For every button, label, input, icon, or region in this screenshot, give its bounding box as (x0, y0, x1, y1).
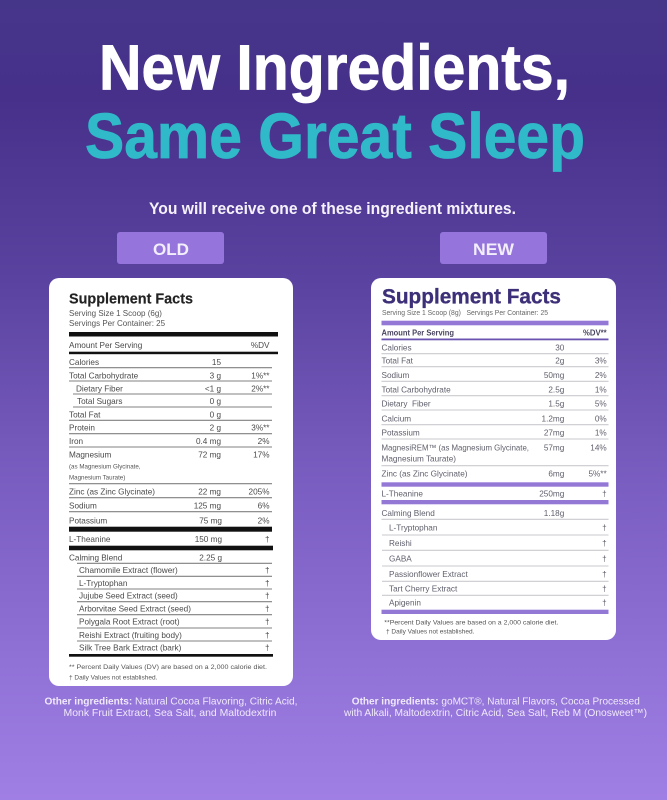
old nutrient rows: 3%** (251, 424, 270, 433)
old nutrient rows: 2 g (210, 424, 221, 433)
old row lines (69, 368, 272, 641)
new calming blend rows: † (602, 524, 607, 533)
old nutrient rows: Iron (69, 437, 84, 446)
tab: new: NEW (473, 240, 515, 259)
old other ingredients (44, 696, 298, 719)
subheading: You will receive one of these ingredient mixtures. (149, 200, 516, 218)
new card background (371, 278, 616, 640)
old nutrient rows: 72 mg (198, 451, 221, 460)
old nutrient rows: 2%** (251, 384, 270, 393)
new nutrient rows: Zinc (as Zinc Glycinate) (382, 470, 468, 479)
old nutrient rows: Magnesium Taurate) (69, 474, 125, 481)
old nutrient rows: Total Carbohydrate (69, 371, 139, 380)
old calming blend rows: † (265, 605, 270, 614)
old heading: Supplement Facts (69, 290, 193, 308)
title (85, 32, 585, 172)
new calming blend rows (382, 509, 607, 607)
new nutrient rows: Magnesium Taurate) (382, 455, 456, 464)
new nutrient rows: L-Theanine (382, 490, 423, 499)
old card background (49, 278, 293, 686)
new row lines (382, 354, 608, 595)
new calming blend rows: † (602, 554, 607, 563)
new nutrient rows: MagnesiREM™ (as Magnesium Glycinate, (382, 443, 529, 452)
new nutrient rows: 2g (555, 356, 565, 365)
old nutrient rows: 0 g (210, 397, 221, 406)
old calming blend rows: Chamomile Extract (flower) (79, 566, 178, 575)
new footnotes: **Percent Daily Values are based on a 2,000 calorie diet. (384, 619, 559, 626)
old nutrient rows: Calories (69, 358, 99, 367)
old calming blend rows: Jujube Seed Extract (seed) (79, 592, 178, 601)
old nutrient rows: 205% (249, 488, 270, 497)
new calming blend rows: Passionflower Extract (389, 570, 468, 579)
old nutrient rows: 22 mg (198, 488, 221, 497)
old footnotes: † Daily Values not established. (69, 674, 158, 681)
new nutrient rows: Calories (382, 344, 412, 353)
old calming blend rows: † (265, 592, 270, 601)
old nutrient rows: 2% (258, 437, 270, 446)
old calming blend rows: † (265, 631, 270, 640)
old nutrient rows: Total Fat (69, 411, 101, 420)
old nutrient rows: 6% (258, 501, 270, 510)
new header rule (382, 338, 608, 340)
new nutrient rows: 5%** (588, 470, 608, 479)
new calming blend rows: Calming Blend (382, 509, 435, 518)
new nutrient rows: 14% (590, 443, 607, 452)
new nutrient rows: 3% (595, 356, 607, 365)
new calming blend rows: GABA (389, 554, 412, 563)
new nutrient rows: Total Fat (382, 356, 414, 365)
new other ingredients: Other ingredients: goMCT®, Natural Flavors, Cocoa Processed (352, 696, 640, 707)
new nutrient rows: 57mg (544, 443, 565, 452)
old table header: Amount Per Serving (69, 341, 143, 350)
new nutrient rows: 30 (555, 344, 565, 353)
new calming blend rows: † (602, 585, 607, 594)
panel: old supplement facts (49, 278, 293, 686)
new footnotes: † Daily Values not established. (386, 629, 475, 636)
old calming blend rows (69, 553, 270, 653)
old nutrient rows (69, 358, 270, 544)
old calming blend rows: Reishi Extract (fruiting body) (79, 631, 182, 640)
old serving info: Serving Size 1 Scoop (6g) (69, 309, 162, 318)
old nutrient rows: 75 mg (199, 517, 222, 526)
old calming blend rows: † (265, 644, 270, 653)
old calming blend rows: L-Tryptophan (79, 579, 128, 588)
title line 2: Same Great Sleep (85, 100, 585, 172)
new footnotes (384, 619, 559, 636)
panel: new supplement facts (371, 278, 616, 640)
new nutrient rows: 2% (595, 371, 607, 380)
new calming blend rows: Apigenin (389, 598, 421, 607)
old nutrient rows: 0 g (210, 411, 221, 420)
new nutrient rows: 2.5g (548, 385, 565, 394)
new calming blend rows: Reishi (389, 539, 412, 548)
old nutrient rows: (as Magnesium Glycinate, (69, 464, 141, 471)
old calming blend rows: † (265, 618, 270, 627)
new nutrient rows: Sodium (382, 371, 409, 380)
new nutrient rows: 1.2mg (542, 414, 565, 423)
new nutrient rows: 1% (595, 429, 607, 438)
new table header: %DV** (583, 328, 607, 337)
new calming blend rows: L-Tryptophan (389, 524, 438, 533)
new nutrient rows: Dietary Fiber (382, 400, 431, 409)
new table header: Amount Per Serving (382, 328, 454, 337)
old table header (69, 341, 270, 350)
old calming blend rows: † (265, 566, 270, 575)
title line 1: New Ingredients, (99, 32, 570, 104)
old nutrient rows: 15 (212, 358, 221, 367)
old calming blend rows: Polygala Root Extract (root) (79, 618, 180, 627)
page content (44, 32, 647, 719)
old nutrient rows: 2% (258, 517, 270, 526)
old calming blend rows: † (265, 579, 270, 588)
old nutrient rows: Magnesium (69, 451, 112, 460)
old nutrient rows: 0.4 mg (196, 437, 221, 446)
old nutrient rows: 3 g (210, 371, 221, 380)
old footnotes (69, 664, 267, 681)
tab: new (440, 232, 547, 264)
old nutrient rows: Potassium (69, 517, 107, 526)
old footnotes: ** Percent Daily Values (DV) are based on a 2,000 calorie diet. (69, 664, 267, 671)
new nutrient rows: Potassium (382, 429, 420, 438)
old calming blend rows: Silk Tree Bark Extract (bark) (79, 644, 182, 653)
old serving info (69, 309, 166, 328)
tab: old: OLD (153, 240, 189, 259)
new other ingredients (343, 696, 647, 719)
new nutrient rows: 50mg (544, 371, 565, 380)
new calming blend rows: † (602, 539, 607, 548)
old calming blend rows: Arborvitae Seed Extract (seed) (79, 605, 191, 614)
old nutrient rows: † (265, 535, 270, 544)
old nutrient rows: Total Sugars (77, 397, 123, 406)
old table header: %DV (251, 341, 270, 350)
new nutrient rows: 1% (595, 385, 607, 394)
old calming blend rows: 2.25 g (199, 553, 222, 562)
new calming blend rows: † (602, 570, 607, 579)
old nutrient rows: 150 mg (195, 535, 222, 544)
new nutrient rows: † (602, 490, 607, 499)
old serving info: Servings Per Container: 25 (69, 319, 166, 328)
new nutrient rows: 0% (595, 414, 607, 423)
new nutrient rows: Total Carbohydrate (382, 385, 451, 394)
new nutrient rows: 1.5g (548, 400, 565, 409)
old nutrient rows: Dietary Fiber (76, 384, 123, 393)
old other ingredients: Monk Fruit Extract, Sea Salt, and Maltodextrin (64, 708, 276, 719)
new nutrient rows: 5% (595, 400, 607, 409)
tab: old (117, 232, 224, 264)
new heading: Supplement Facts (382, 285, 561, 308)
new nutrient rows: Calcium (382, 414, 411, 423)
old nutrient rows: 17% (253, 451, 270, 460)
new divider bars (382, 321, 608, 614)
old calming blend rows: Calming Blend (69, 553, 123, 562)
new nutrient rows: 250mg (539, 490, 565, 499)
old nutrient rows: Sodium (69, 501, 97, 510)
old nutrient rows: Zinc (as Zinc Glycinate) (69, 488, 155, 497)
new calming blend rows: 1.18g (544, 509, 565, 518)
new serving info: Serving Size 1 Scoop (8g) Servings Per Container: 25 (382, 310, 548, 317)
new nutrient rows: 27mg (544, 429, 565, 438)
new table header (382, 328, 607, 337)
old nutrient rows: L-Theanine (69, 535, 111, 544)
new calming blend rows: † (602, 598, 607, 607)
old nutrient rows: 1%** (251, 371, 270, 380)
new calming blend rows: Tart Cherry Extract (389, 585, 458, 594)
old nutrient rows: 125 mg (194, 501, 221, 510)
old other ingredients: Other ingredients: Natural Cocoa Flavoring, Citric Acid, (44, 696, 298, 707)
old nutrient rows: <1 g (205, 384, 221, 393)
new other ingredients: with Alkali, Maltodextrin, Citric Acid, Sea Salt, Reb M (Onosweet™) (343, 708, 647, 719)
old nutrient rows: Protein (69, 424, 95, 433)
old divider lines (69, 332, 278, 657)
new nutrient rows (382, 344, 608, 499)
new nutrient rows: 6mg (548, 470, 565, 479)
